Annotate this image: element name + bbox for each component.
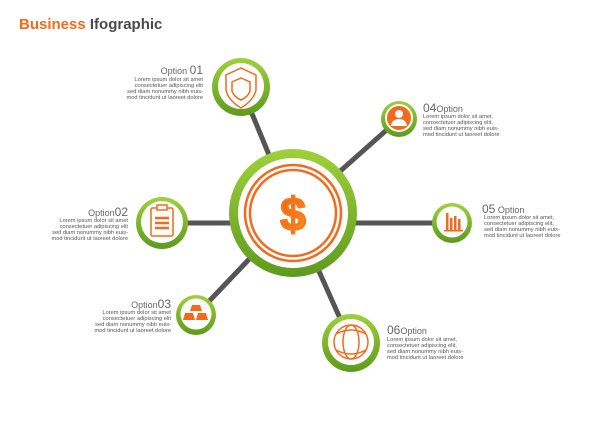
text: option 06: mod tincidunt ut laoreet dolore	[387, 355, 464, 361]
text: option 01	[126, 63, 203, 101]
icon: gold bars (option 03)	[176, 295, 216, 335]
text: option 05: sed diam nonummy nibh euis-	[484, 227, 560, 233]
text: option 02: mod tincidunt ut laoreet dolore	[51, 236, 128, 242]
text: option 02: consectetuer adipiscing elit	[60, 224, 128, 230]
text: option 02: Lorem ipsum dolor sit amet	[59, 218, 128, 224]
text: option 06	[387, 323, 464, 361]
text: option 01: Option 01	[161, 63, 203, 77]
text: option 02: Option02	[88, 205, 128, 219]
icon: bar chart (option 05)	[432, 203, 472, 243]
text: option 01: Lorem ipsum dolor sit amet	[134, 77, 203, 83]
text: option 05: 05 Option	[482, 202, 524, 216]
text: option 05: mod tincidunt ut laoreet dolore	[484, 233, 561, 239]
text: option 01: mod tincidunt ut laoreet dolore	[126, 95, 203, 101]
text: option 05: Lorem ipsum dolor sit amet,	[484, 215, 555, 221]
text: option 06: Lorem ipsum dolor sit amet,	[387, 337, 458, 343]
icon: shield (option 01)	[212, 58, 270, 116]
text: option 01: consectetuer adipiscing elit	[135, 83, 203, 89]
text: option 03: mod tincidunt ut laoreet dolore	[94, 328, 171, 334]
text: option 04: 04Option	[423, 101, 463, 115]
text: option 04: Lorem ipsum dolor sit amet,	[423, 114, 494, 120]
text: option 04: sed diam nonummy nibh euis-	[423, 126, 499, 132]
icon: clipboard (option 02)	[136, 197, 188, 249]
text: option 05	[482, 202, 561, 239]
central hub: dollar	[229, 149, 357, 277]
text: option 06: consectetuer adipiscing elit,	[387, 343, 457, 349]
text: option 03: Lorem ipsum dolor sit amet	[102, 310, 171, 316]
text: option 04: mod tincidunt ut laoreet dolore	[423, 132, 500, 138]
text: option 02: sed diam nonummy nibh euis-	[52, 230, 128, 236]
text: option 03: consectetuer adipiscing elit	[103, 316, 171, 322]
text: option 03	[94, 297, 171, 334]
connector lines	[162, 87, 452, 343]
central hub: dollar: $	[280, 188, 306, 240]
text: option 02	[51, 205, 128, 242]
icon: person (option 04)	[381, 101, 417, 137]
text: option 04: consectetuer adipiscing elit,	[423, 120, 493, 126]
text: option 03: Option03	[131, 297, 171, 311]
icon: globe (option 06)	[322, 314, 380, 372]
text: option 05: consectetuer adipiscing elit,	[484, 221, 554, 227]
text: option 03: sed diam nonummy nibh euis-	[95, 322, 171, 328]
text: option 04	[423, 101, 500, 138]
text: option 06: 06Option	[387, 323, 427, 337]
title: Business Ifographic	[19, 16, 162, 33]
text: option 01: sed diam nonummy nibh euis-	[127, 89, 203, 95]
text: option 06: sed diam nonummy nibh euis-	[387, 349, 463, 355]
